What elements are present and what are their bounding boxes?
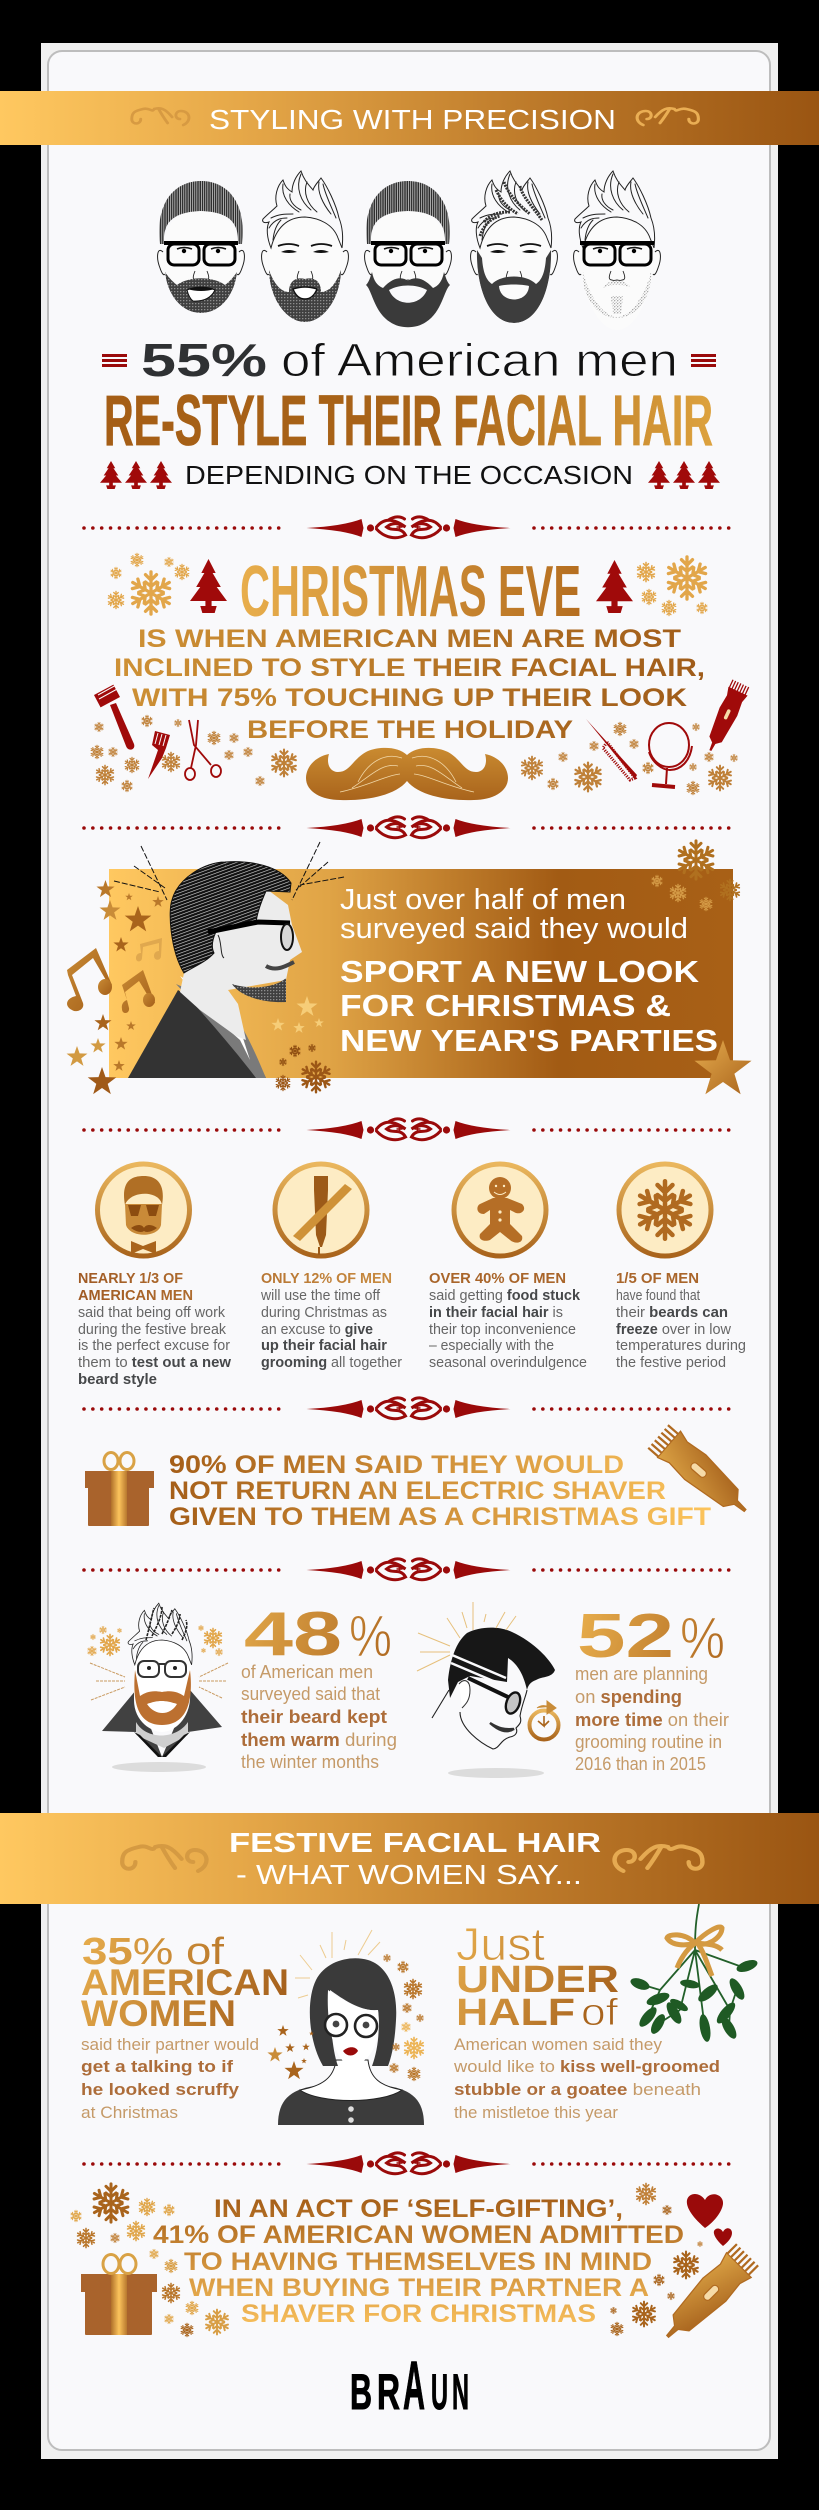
face 5: thin goatee with glasses, spiky hair bbox=[574, 171, 660, 330]
bearded man illustration bbox=[87, 1603, 228, 1772]
section: christmas eve bbox=[90, 552, 751, 800]
paragraph: BEFORE THE HOLIDAY bbox=[247, 716, 573, 744]
stat 48 percent: the winter months bbox=[241, 1752, 379, 1772]
column 3: OVER 40% OF MEN bbox=[429, 1271, 566, 1287]
column 1: AMERICAN MEN bbox=[78, 1288, 193, 1304]
column 4 bbox=[616, 1271, 746, 1371]
stat: 35 percent of american women: WOMEN bbox=[81, 1993, 236, 2034]
paragraph bbox=[114, 625, 705, 744]
column 1: NEARLY 1/3 OF bbox=[78, 1271, 183, 1287]
divider bbox=[84, 1559, 737, 1580]
column 2: grooming all together bbox=[261, 1355, 402, 1371]
stat: just under half: would like to kiss well-groomed bbox=[453, 2058, 720, 2076]
icon: electric clipper bbox=[647, 1422, 757, 1524]
column 2 bbox=[260, 1271, 402, 1371]
text: N bbox=[452, 2364, 469, 2420]
column 1: during the festive break bbox=[78, 1322, 227, 1338]
stat 52 percent: 2016 than in 2015 bbox=[575, 1754, 706, 1774]
flourish left bbox=[132, 108, 189, 125]
trees bbox=[100, 461, 720, 489]
stat 52 percent: % bbox=[680, 1606, 725, 1671]
55 percent: 55% bbox=[141, 334, 267, 386]
column 4: have found that bbox=[616, 1288, 700, 1304]
self-gifting text bbox=[153, 2195, 684, 2328]
five bearded faces bbox=[158, 171, 660, 342]
braun logo: U bbox=[431, 2364, 448, 2420]
stat 52 percent: grooming routine in bbox=[575, 1732, 722, 1752]
braun logo bbox=[350, 2347, 469, 2424]
divider bbox=[84, 817, 737, 838]
face 1: stubble with glasses bbox=[158, 181, 244, 342]
icon: hearts bbox=[687, 2194, 732, 2246]
banner: festive facial hair bbox=[0, 1813, 819, 1904]
stat: just under half: of bbox=[581, 1992, 619, 2034]
icon: clipper bottom bbox=[655, 2243, 761, 2349]
stat 52 percent: men are planning bbox=[575, 1664, 708, 1684]
column 2: ONLY 12% OF MEN bbox=[261, 1271, 392, 1287]
column 3: seasonal overindulgence bbox=[429, 1355, 587, 1371]
column 3: their top inconvenience bbox=[429, 1322, 576, 1338]
flourish right bbox=[637, 108, 698, 125]
banner: styling with precision bbox=[0, 91, 819, 145]
column 3: – especially with the bbox=[429, 1338, 554, 1354]
of American men text: of American men bbox=[281, 334, 678, 386]
braun logo: B bbox=[350, 2364, 372, 2420]
depending line: DEPENDING ON THE OCCASION bbox=[185, 460, 633, 490]
flourish right bbox=[615, 1846, 702, 1871]
stat: just under half: the mistletoe this year bbox=[454, 2104, 619, 2122]
red scissors bbox=[185, 720, 221, 780]
flourish left bbox=[122, 1846, 207, 1871]
stat 48 percent: 48 bbox=[244, 1600, 342, 1669]
panel bold text: SPORT A NEW LOOK bbox=[340, 954, 700, 989]
stat: 35 percent of american women: said their partner would bbox=[81, 2036, 259, 2054]
column 3 bbox=[429, 1271, 587, 1371]
self-gifting text: IN AN ACT OF ‘SELF-GIFTING’, bbox=[214, 2195, 623, 2223]
stat 52 percent: on spending bbox=[575, 1687, 682, 1707]
divider bbox=[84, 2153, 737, 2174]
stat: just under half: Just bbox=[456, 1918, 545, 1970]
column 4: 1/5 OF MEN bbox=[616, 1271, 699, 1287]
divider bbox=[84, 1119, 737, 1140]
stat: 35 percent of american women: 35% of bbox=[82, 1931, 225, 1973]
icon: crossed-out clipper in circle bbox=[275, 1164, 367, 1256]
column 2: an excuse to give bbox=[261, 1322, 373, 1338]
column 1: beard style bbox=[78, 1372, 157, 1388]
column 1: is the perfect excuse for bbox=[78, 1338, 230, 1354]
column 2: up their facial hair bbox=[261, 1338, 387, 1354]
face 3: full dark beard with glasses bbox=[365, 181, 451, 330]
red brush bbox=[148, 731, 170, 779]
snowflakes on panel bbox=[275, 841, 741, 1092]
self-gifting text: 41% OF AMERICAN WOMEN ADMITTED bbox=[153, 2221, 684, 2249]
column 4: freeze over in low bbox=[616, 1322, 732, 1338]
panel text second line: surveyed said they would bbox=[340, 913, 688, 945]
music notes bbox=[67, 938, 162, 1013]
face 2: stubble and moustache, spiky hair bbox=[262, 171, 348, 342]
stars left bbox=[67, 880, 164, 1094]
headline bbox=[100, 334, 720, 490]
xmas trees bbox=[190, 559, 633, 613]
stat 48 percent: % bbox=[349, 1604, 392, 1669]
profile man illustration bbox=[114, 842, 344, 1078]
icon: gingerbread man in circle bbox=[454, 1164, 546, 1256]
column 4: the festive period bbox=[616, 1355, 726, 1371]
stat 48 percent: their beard kept bbox=[241, 1707, 387, 1727]
banner second line: - WHAT WOMEN SAY... bbox=[236, 1859, 582, 1890]
self-gifting text: TO HAVING THEMSELVES IN MIND bbox=[184, 2248, 652, 2276]
christmas eve title: CHRISTMAS EVE bbox=[240, 552, 581, 632]
panel bold text: NEW YEAR'S PARTIES bbox=[340, 1023, 718, 1058]
90 percent text: GIVEN TO THEM AS A CHRISTMAS GIFT bbox=[169, 1503, 711, 1531]
90 percent text: NOT RETURN AN ELECTRIC SHAVER bbox=[169, 1477, 666, 1505]
stat: 35 percent of american women: he looked scruffy bbox=[81, 2081, 240, 2099]
stars on panel bbox=[271, 996, 324, 1033]
red razor bbox=[94, 684, 134, 750]
stat 52 percent: more time on their bbox=[575, 1710, 729, 1730]
braun logo: R bbox=[377, 2364, 400, 2420]
panel text light: Just over half of men bbox=[340, 884, 626, 916]
banner bold line: FESTIVE FACIAL HAIR bbox=[229, 1827, 601, 1858]
big star bbox=[694, 1040, 752, 1094]
face 4: dense beard, spiky hair bbox=[471, 171, 557, 342]
red clipper bbox=[701, 679, 751, 755]
panel bold text: FOR CHRISTMAS & bbox=[340, 988, 671, 1023]
stat 48 percent bbox=[241, 1600, 397, 1772]
stat: just under half: stubble or a goatee beneath bbox=[454, 2081, 701, 2099]
stat: just under half: UNDER bbox=[456, 1959, 619, 2001]
pompadour man illustration with clock bbox=[417, 1602, 558, 1778]
90 percent text: 90% OF MEN SAID THEY WOULD bbox=[169, 1451, 624, 1479]
banner heading: STYLING WITH PRECISION bbox=[209, 104, 616, 135]
stat 52 percent: 52 bbox=[577, 1602, 674, 1671]
column 2: during Christmas as bbox=[261, 1305, 387, 1321]
column 1: them to test out a new bbox=[78, 1355, 232, 1371]
woman illustration bbox=[267, 1930, 425, 2125]
stat 52 percent bbox=[575, 1602, 729, 1774]
stat: 35 percent of american women: get a talking to if bbox=[81, 2058, 234, 2076]
stat 48 percent: them warm during bbox=[241, 1730, 397, 1750]
gradient panel bbox=[109, 869, 733, 1078]
column 2: will use the time off bbox=[260, 1288, 381, 1304]
column 4: their beards can bbox=[616, 1305, 728, 1321]
panel: new look for parties bbox=[67, 841, 752, 1094]
column 3: said getting food stuck bbox=[429, 1288, 581, 1304]
icon: snowflake in circle bbox=[619, 1164, 711, 1256]
red mirror bbox=[649, 723, 692, 787]
column 1 bbox=[78, 1271, 232, 1388]
paragraph: IS WHEN AMERICAN MEN ARE MOST bbox=[138, 625, 681, 653]
columns of stats bbox=[78, 1271, 746, 1388]
column 1: said that being off work bbox=[78, 1305, 226, 1321]
column 3: in their facial hair is bbox=[429, 1305, 563, 1321]
icon: bearded man in circle bbox=[98, 1164, 190, 1256]
stat: just under half: HALF bbox=[456, 1992, 575, 2034]
icon: gift box bottom bbox=[81, 2254, 157, 2335]
divider bbox=[84, 1398, 737, 1419]
mistletoe bbox=[629, 1904, 759, 2043]
panel bold text bbox=[340, 954, 718, 1058]
stat 48 percent: of American men bbox=[241, 1662, 373, 1682]
paragraph: WITH 75% TOUCHING UP THEIR LOOK bbox=[132, 684, 687, 712]
red bars bbox=[102, 354, 716, 367]
moustache bbox=[306, 748, 508, 800]
self-gifting text: SHAVER FOR CHRISTMAS bbox=[241, 2300, 596, 2328]
stat: 35 percent of american women: at Christmas bbox=[81, 2104, 178, 2122]
divider bbox=[84, 517, 737, 538]
braun logo: A bbox=[403, 2347, 425, 2424]
stat: just under half bbox=[453, 1918, 720, 2122]
gold snowflakes top bbox=[107, 553, 708, 616]
snowflakes lower bbox=[90, 715, 738, 795]
stat 48 percent: surveyed said that bbox=[241, 1684, 380, 1704]
self-gifting text: WHEN BUYING THEIR PARTNER A bbox=[189, 2274, 649, 2302]
snowflakes bottom bbox=[70, 2183, 703, 2337]
red comb bbox=[586, 719, 637, 780]
icon: gift box bbox=[85, 1452, 154, 1526]
stat: 35 percent of american women: AMERICAN bbox=[81, 1962, 289, 2003]
column 4: temperatures during bbox=[616, 1338, 746, 1354]
90 percent text bbox=[169, 1451, 711, 1531]
paragraph: INCLINED TO STYLE THEIR FACIAL HAIR, bbox=[114, 654, 705, 682]
stat: just under half: American women said they bbox=[454, 2036, 663, 2054]
stat: 35 percent of american women bbox=[81, 1931, 289, 2122]
